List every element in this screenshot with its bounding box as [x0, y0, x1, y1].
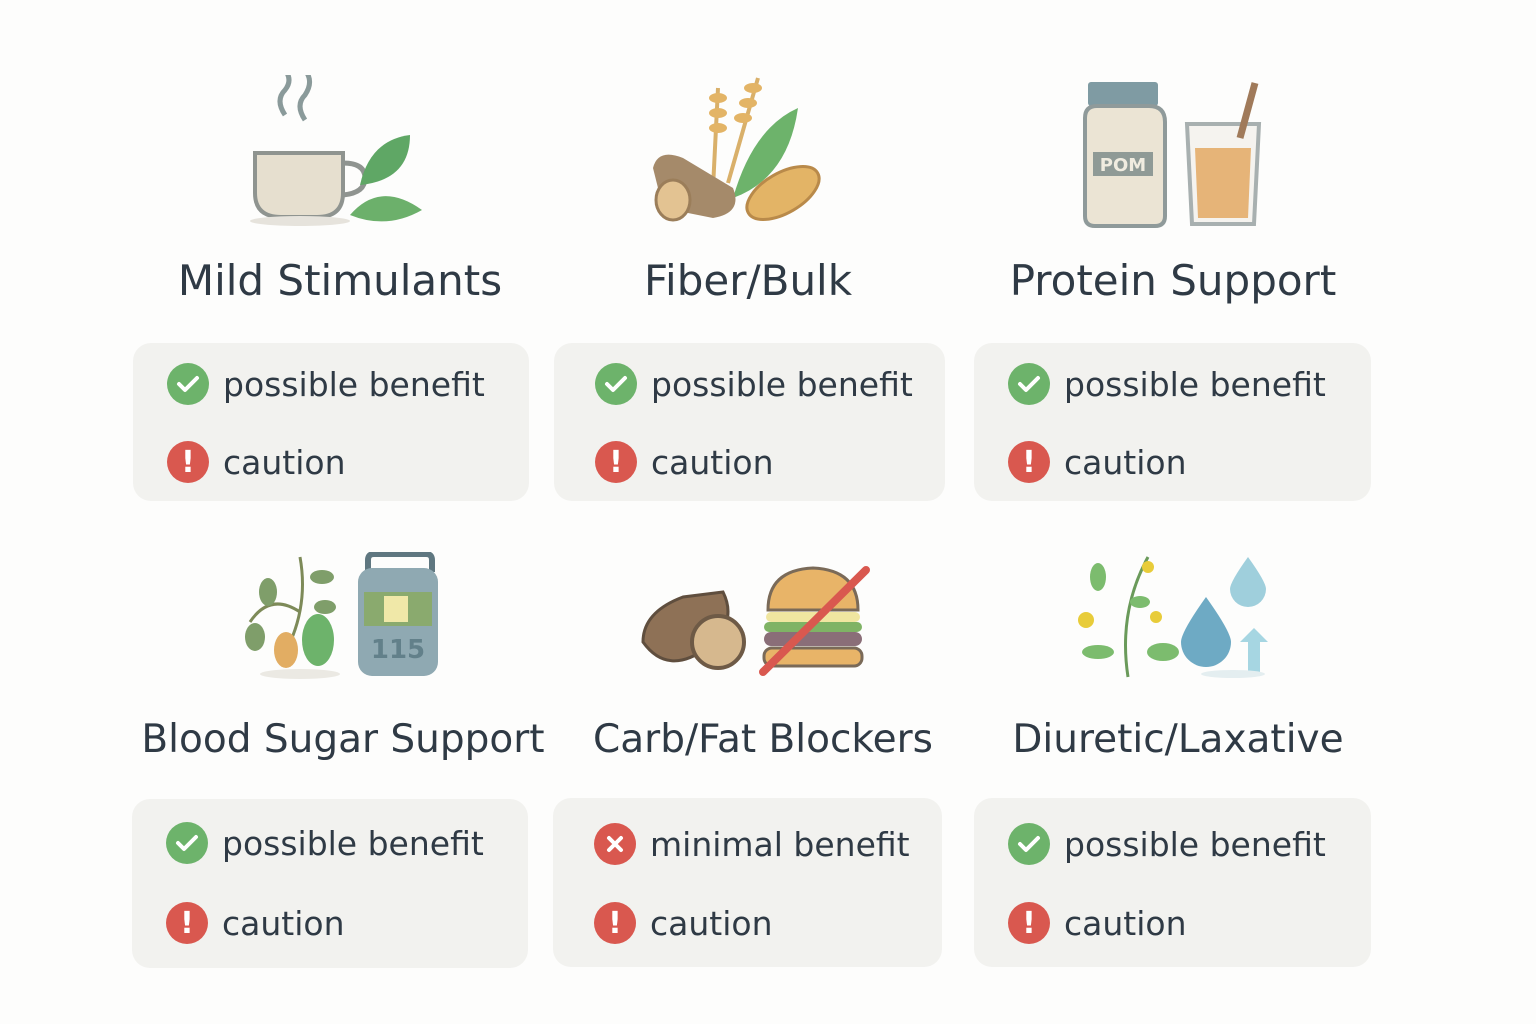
icon: fiber grains — [653, 78, 821, 222]
row: caution — [594, 902, 772, 944]
row: caution: caution — [1064, 442, 1186, 482]
row: caution: ! — [180, 906, 194, 940]
title: Carb/Fat Blockers: Carb/Fat Blockers — [593, 717, 933, 762]
row: caution — [595, 441, 774, 483]
card: Blood Sugar Support — [132, 799, 528, 968]
row: caution: caution — [223, 442, 346, 482]
row: caution: caution — [650, 904, 772, 942]
row: possible benefit: possible benefit — [651, 364, 913, 404]
icon: herbs and water drops — [1078, 556, 1268, 678]
row: caution — [167, 441, 346, 483]
title: Diuretic/Laxative: Diuretic/Laxative — [1012, 717, 1344, 762]
row: caution: ! — [608, 906, 622, 940]
icon: potato and crossed burger — [642, 566, 870, 676]
card: Diuretic/Laxative — [974, 798, 1371, 967]
row: possible benefit: possible benefit — [222, 824, 484, 862]
row: caution — [166, 902, 344, 944]
icon: plant and glucose meter — [245, 552, 438, 679]
row: caution: caution — [651, 442, 774, 482]
row: possible benefit: possible benefit — [223, 364, 485, 404]
title: Mild Stimulants: Mild Stimulants — [178, 256, 502, 305]
card: Carb/Fat Blockers — [553, 798, 942, 967]
row: possible benefit: possible benefit — [1064, 364, 1326, 404]
row: caution: caution — [1064, 904, 1186, 942]
card: Protein Support — [974, 343, 1371, 501]
row: caution — [1008, 902, 1186, 944]
row: caution: ! — [1022, 906, 1036, 940]
row: caution: caution — [222, 904, 344, 942]
row: minimal benefit: minimal benefit — [650, 824, 910, 864]
title: Protein Support: Protein Support — [1010, 256, 1336, 305]
row: caution — [1008, 441, 1186, 483]
icon: protein jar and shake — [1083, 82, 1262, 228]
row: caution: ! — [1022, 444, 1036, 480]
icon: protein jar and shake: POM — [1100, 155, 1146, 176]
icon: plant and glucose meter: 115 — [371, 635, 425, 665]
card: Fiber/Bulk — [554, 343, 945, 501]
row: caution: ! — [181, 444, 195, 480]
title: Blood Sugar Support: Blood Sugar Support — [141, 717, 545, 762]
title: Fiber/Bulk: Fiber/Bulk — [644, 256, 852, 305]
row: possible benefit: possible benefit — [1064, 824, 1326, 864]
row: caution: ! — [609, 444, 623, 480]
card: Mild Stimulants — [133, 343, 529, 501]
icon: tea cup and leaves — [250, 75, 422, 226]
